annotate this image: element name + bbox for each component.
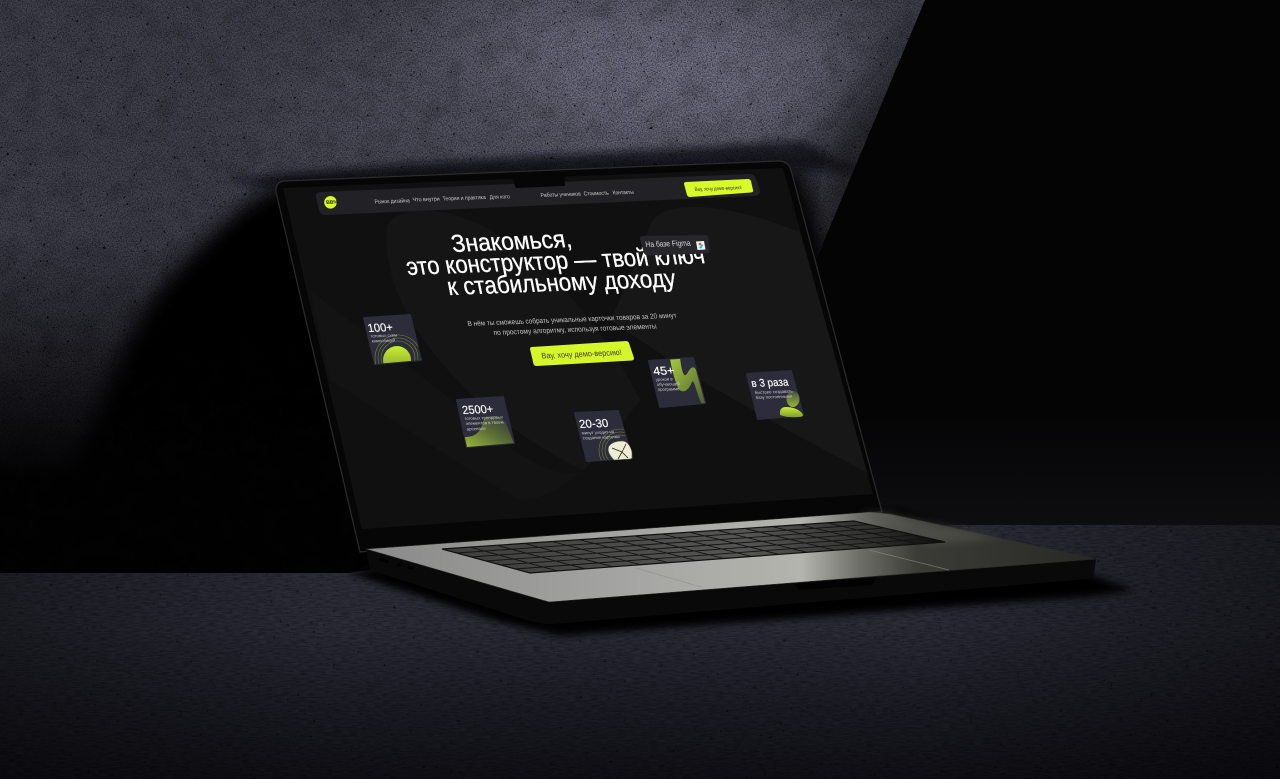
nav button: Вау, хочу демо-версию!	[694, 185, 742, 193]
logo	[324, 196, 339, 209]
ports	[379, 558, 413, 570]
card: 2500+: 2500+	[461, 403, 495, 417]
floor	[0, 520, 1280, 779]
badge: built on Figma: На базе Figma	[645, 239, 692, 249]
nav links: Для кого	[489, 194, 510, 201]
heading: Знакомься,	[449, 226, 574, 258]
nav links: Контакты	[612, 190, 634, 196]
card: 2500+: элементов в твоем	[465, 420, 504, 426]
card: 45+: обучающей	[656, 381, 681, 387]
heading: это конструктор — твой ключ	[404, 242, 707, 281]
laptop base: top deck	[366, 512, 1096, 602]
lid shadow on wall	[88, 157, 828, 573]
card: 2500+	[457, 397, 515, 450]
contact shadow of laptop on floor	[345, 510, 1135, 636]
card: 20-30: 20-30	[578, 417, 610, 431]
front notch	[794, 578, 876, 590]
nav links: Стоимость	[583, 191, 609, 197]
nav links	[374, 190, 634, 205]
card: 45+	[649, 358, 706, 407]
card: 3x faster: быстрее создавать	[754, 388, 794, 395]
laptop lid	[276, 161, 882, 552]
card: 45+: уроков в	[655, 376, 674, 382]
card: 3x faster: базу постоянными	[755, 394, 793, 400]
card: 3x faster	[747, 371, 803, 419]
far dark floor right	[800, 420, 1280, 530]
card: 20-30	[574, 410, 633, 462]
wall	[0, 0, 930, 600]
card: 100+: готовых схем	[370, 332, 398, 338]
nav links: Рынок дизайна	[374, 197, 411, 205]
soft shadow band above lid	[225, 141, 870, 188]
trackpad	[636, 550, 949, 587]
laptop	[276, 161, 1096, 624]
subheading paragraph	[467, 311, 678, 337]
camera notch	[513, 176, 565, 188]
card: 3x faster: в 3 раза	[750, 377, 790, 390]
logo: BB%	[326, 200, 339, 206]
heading	[404, 226, 707, 301]
screen	[283, 168, 873, 529]
heading: к стабильному доходу	[445, 266, 679, 301]
card: 100+	[363, 314, 422, 365]
card: 20-30: минут уходит на	[581, 429, 615, 435]
screen background swooshes	[310, 207, 868, 500]
card: 45+: программе	[657, 386, 680, 392]
CTA button	[530, 341, 634, 366]
icon: figma	[696, 241, 706, 250]
deck rear highlight	[860, 513, 1000, 544]
badge: built on Figma	[640, 235, 710, 256]
keyboard	[442, 521, 945, 573]
subheading paragraph: по простому алгоритму, используя готовые элементы	[493, 322, 657, 337]
nav links: Что внутри	[412, 197, 440, 203]
laptop base: side and front edge	[366, 549, 1096, 624]
card: 2500+: готовых трендовых	[464, 414, 504, 421]
subheading paragraph: В нём ты сможешь собрать уникальные карточки товаров за 20 минут	[467, 311, 678, 328]
nav button	[684, 179, 753, 197]
card: 45+: 45+	[652, 364, 676, 378]
icon: clock	[608, 441, 632, 460]
nav links: Теория и практика	[442, 195, 487, 202]
card: 100+: композиций	[371, 338, 396, 343]
card: 20-30: создание карточки	[582, 434, 621, 440]
nav bar	[316, 174, 760, 215]
card: 100+: 100+	[367, 321, 394, 335]
nav links: Работы учеников	[540, 192, 581, 199]
card: 2500+: арсенале	[466, 426, 487, 431]
CTA button: Вау, хочу демо-версию!	[541, 348, 622, 360]
